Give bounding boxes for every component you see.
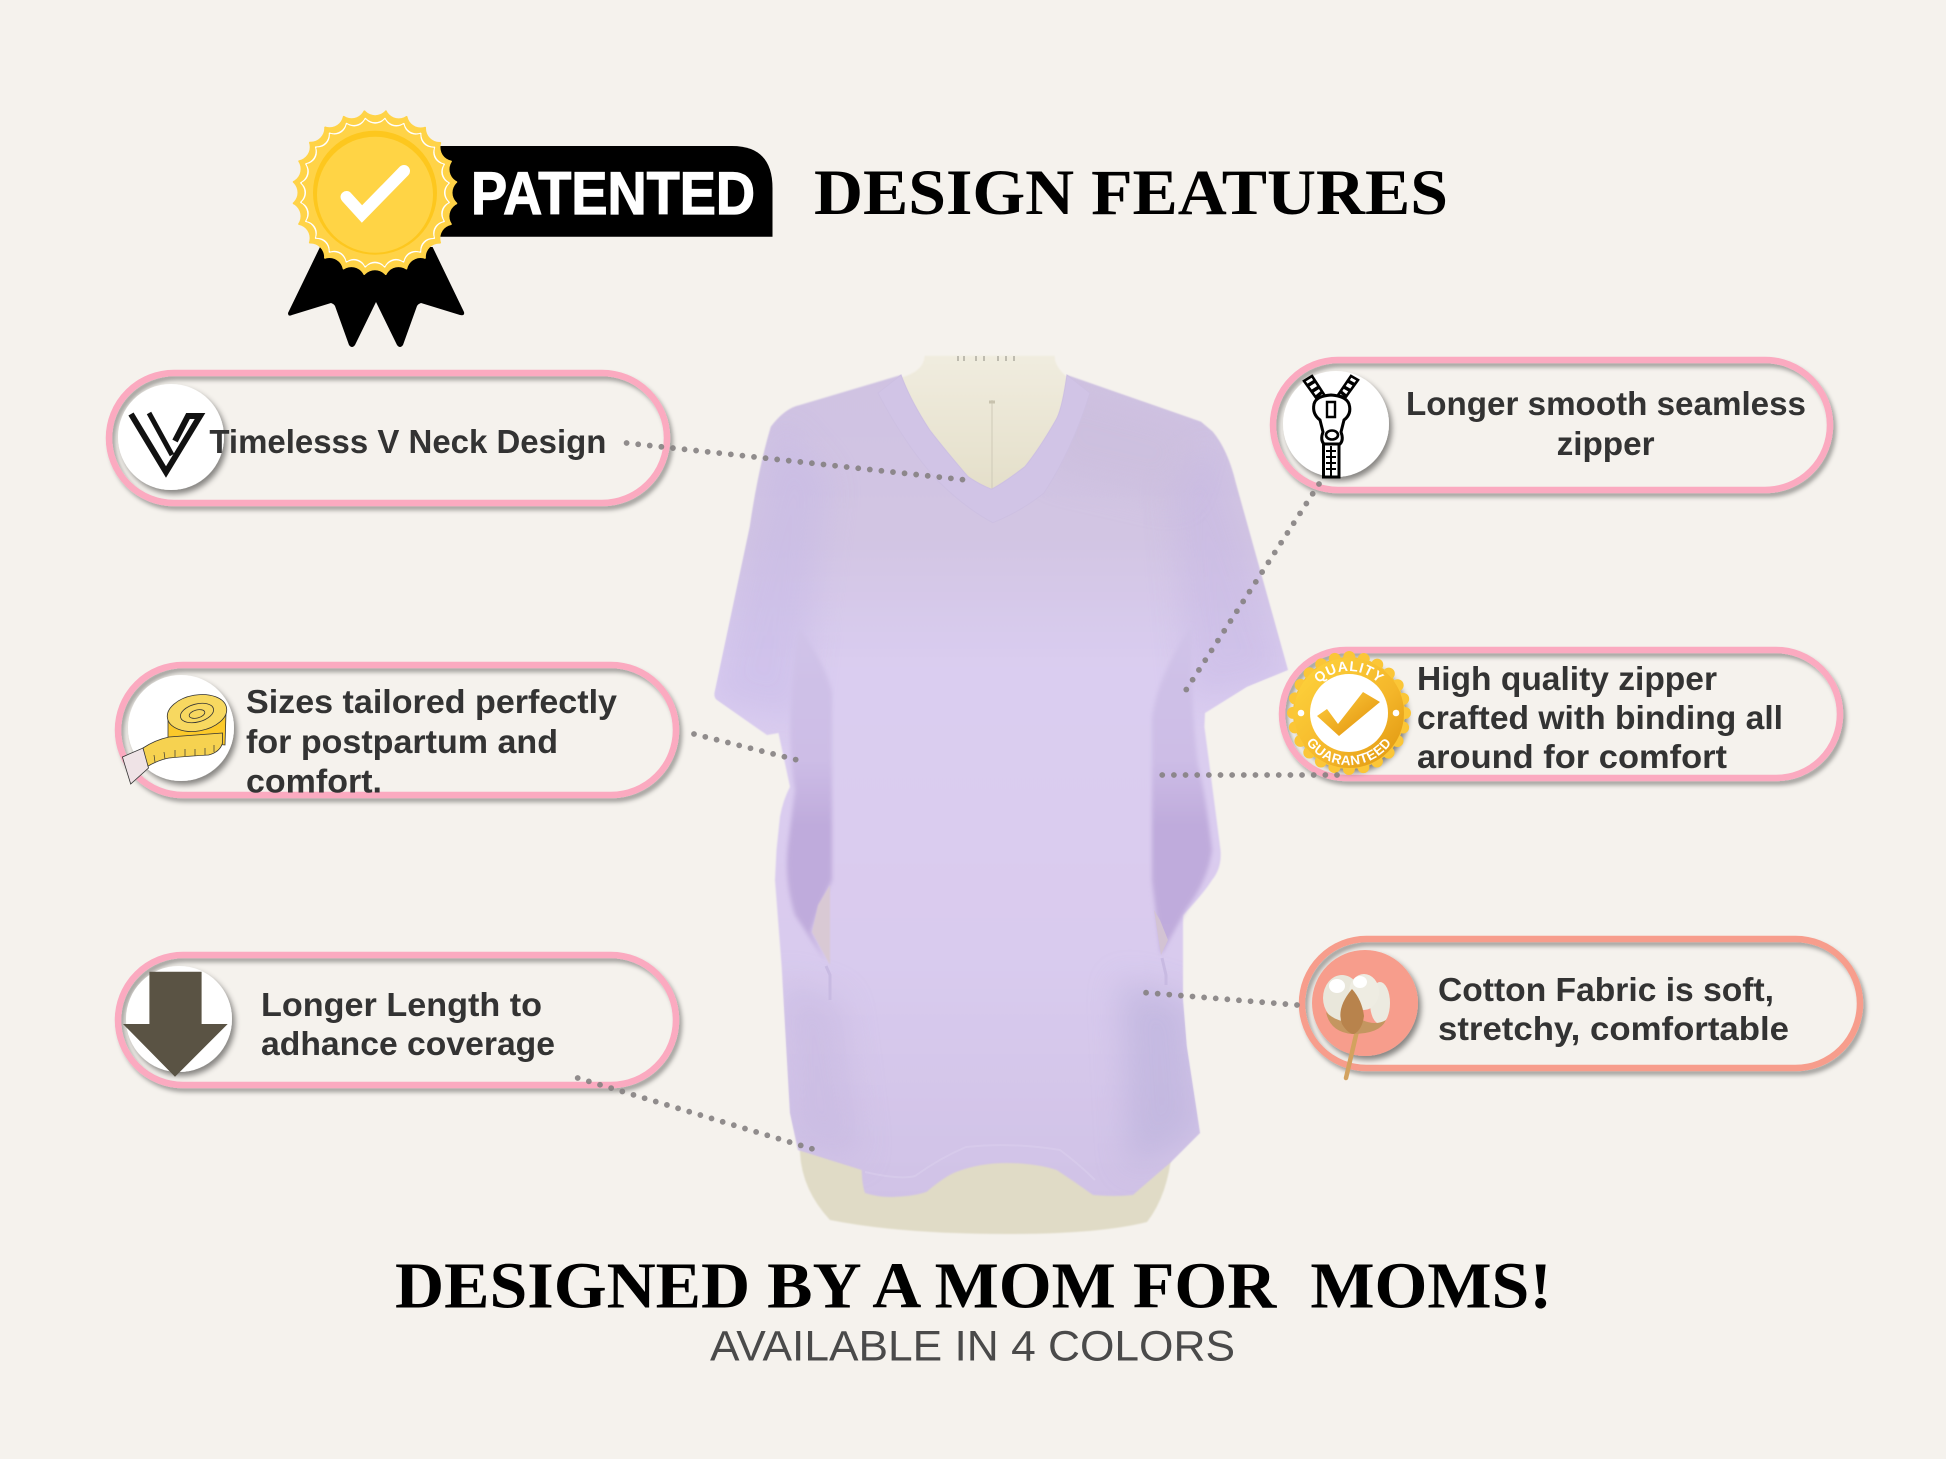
left nursing opening	[787, 627, 832, 962]
icon: down arrow	[123, 966, 232, 1077]
panel: zipper	[1273, 360, 1830, 490]
label: Timelesss V Neck Design	[209, 423, 606, 460]
dotted leader: zipper	[1186, 484, 1319, 690]
title: design features: DESIGN FEATURES	[814, 157, 1448, 229]
label: around for comfort	[1417, 738, 1727, 775]
label: stretchy, comfortable	[1438, 1010, 1789, 1047]
panel: cotton	[1302, 939, 1860, 1078]
panel: quality zipper	[1278, 646, 1849, 788]
gold seal	[292, 110, 458, 276]
label: comfort.	[246, 763, 382, 800]
label: for postpartum and	[246, 723, 558, 760]
icon: quality seal: GUARANTEED	[1308, 738, 1390, 766]
shirt shading	[710, 380, 1290, 1170]
shirt body	[714, 375, 1288, 1197]
photo: t-shirt on mannequin	[710, 356, 1290, 1234]
subheading: available colors: AVAILABLE IN 4 COLORS	[710, 1323, 1235, 1371]
label: High quality zipper	[1417, 660, 1717, 697]
panel: v neck	[109, 373, 667, 503]
left opening inner	[812, 885, 830, 965]
label	[1438, 971, 1789, 1047]
label: Longer smooth seamless	[1406, 385, 1806, 422]
heading: designed by a mom: DESIGNED BY A MOM FOR MOMS!	[395, 1250, 1552, 1323]
dotted leader: length	[578, 1078, 813, 1149]
label: Sizes tailored perfectly	[246, 683, 618, 720]
icon: quality seal	[1287, 651, 1412, 777]
label: zipper	[1557, 425, 1655, 462]
label: Longer Length to	[261, 986, 542, 1023]
ribbon tails	[288, 247, 464, 347]
right nursing opening	[1152, 625, 1212, 955]
dotted leader: sizes	[694, 734, 796, 760]
label: crafted with binding all	[1417, 699, 1783, 736]
right opening inner	[1154, 910, 1168, 955]
panel: sizes	[118, 665, 676, 800]
label: Cotton Fabric is soft,	[1438, 971, 1774, 1008]
label	[1417, 660, 1783, 775]
label	[246, 683, 618, 800]
mannequin base	[796, 1100, 1180, 1234]
zipper ends	[826, 958, 1166, 1000]
icon: tape measure	[122, 675, 234, 784]
mannequin neck	[899, 356, 1075, 500]
label	[261, 986, 555, 1062]
dotted leader: cotton	[1146, 993, 1297, 1005]
dotted leader: quality zipper	[1161, 772, 1337, 778]
label	[1406, 385, 1806, 462]
check mark	[346, 171, 404, 214]
label: adhance coverage	[261, 1025, 555, 1062]
hem stitch	[865, 1145, 1095, 1180]
icon: quality seal: QUALITY	[1314, 661, 1384, 682]
banner text: PATENTED	[471, 160, 755, 227]
icon circle: v neck	[118, 384, 224, 490]
icon: cotton boll	[1312, 950, 1418, 1078]
badge: patented	[288, 110, 772, 347]
dotted leader: v neck	[627, 443, 966, 480]
panel: length	[118, 955, 676, 1085]
icon: zipper	[1283, 371, 1389, 477]
black banner	[430, 146, 772, 237]
collar band	[878, 375, 1090, 523]
